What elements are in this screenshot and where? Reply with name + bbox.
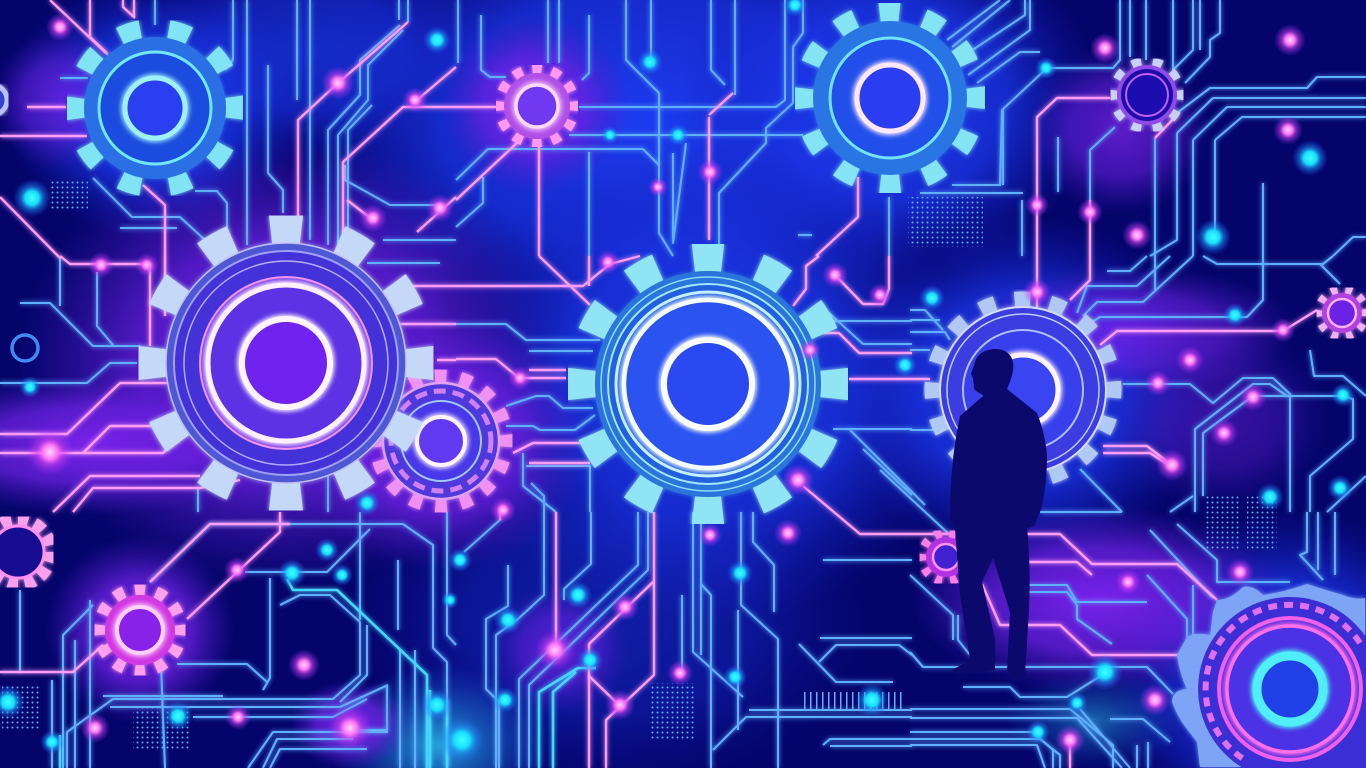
gear: small pink by silhouette (922, 533, 970, 581)
gear: lower left pink (99, 589, 181, 671)
gear: small far right (1319, 290, 1365, 336)
gear: medium lower centre left (376, 376, 506, 506)
dot grids (2, 180, 1277, 750)
gear: top right small (1114, 62, 1180, 128)
ring icon: left edge (12, 335, 38, 361)
gear: top centre small pink (500, 69, 574, 143)
gear: top left (75, 28, 235, 188)
gear: top right centre (804, 12, 976, 184)
gear: behind silhouette (932, 299, 1114, 481)
gear: bottom right large (1172, 584, 1366, 768)
silhouette: standing man (950, 349, 1047, 680)
gear: left edge pink (0, 520, 50, 584)
gear: large left (152, 229, 420, 497)
bright cyan traces (60, 579, 596, 768)
gear: large centre (581, 257, 835, 511)
gear: left edge top fragment (0, 85, 7, 115)
